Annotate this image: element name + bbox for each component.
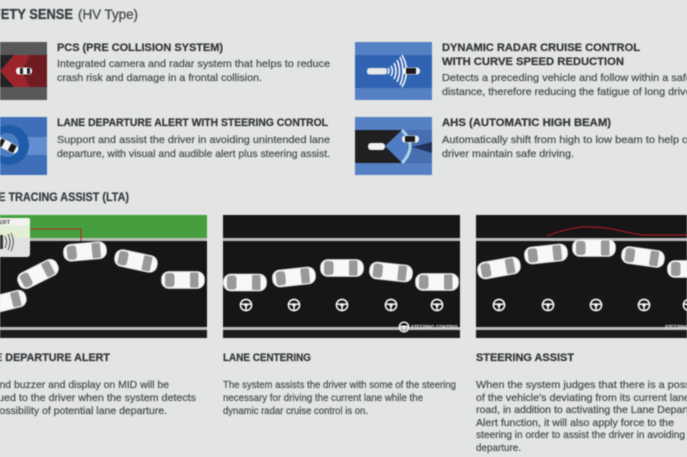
cars bbox=[224, 260, 458, 291]
description: automatic high beam bbox=[442, 135, 687, 160]
description bbox=[0, 380, 196, 417]
callout: alert display bbox=[0, 218, 30, 257]
description: PCS bbox=[57, 59, 330, 84]
column: lane departure alert text bbox=[0, 352, 196, 417]
heading: dynamic radar cruise control bbox=[442, 42, 640, 68]
heading: dynamic radar cruise control: DYNAMIC RADAR CRUISE CONTROL bbox=[442, 42, 640, 54]
column: steering assist text bbox=[476, 352, 687, 454]
description: automatic high beam: Automatically shift from high to low beam to help our bbox=[442, 135, 687, 146]
description: dynamic radar cruise control: distance, therefore reducing the fatigue of long drives. bbox=[442, 87, 687, 98]
description: PCS: Integrated camera and radar system that helps to reduce bbox=[57, 59, 330, 70]
panel: steering assist diagram bbox=[476, 215, 687, 338]
icon: automatic high beam bbox=[355, 117, 432, 175]
legend: steering control bbox=[399, 322, 460, 332]
heading: lane departure alert: LANE DEPARTURE ALERT WITH STEERING CONTROL bbox=[57, 117, 328, 129]
title bbox=[0, 7, 138, 23]
description: automatic high beam: driver maintain safe driving. bbox=[442, 149, 574, 160]
icon: lane departure bbox=[0, 117, 47, 175]
feature: automatic high beam bbox=[355, 117, 687, 175]
description: lane departure alert bbox=[57, 135, 330, 160]
description bbox=[223, 380, 456, 417]
panel: lane departure alert diagram bbox=[0, 215, 207, 338]
description: Alert function, it will also apply force to the bbox=[476, 418, 674, 429]
description: necessary for driving the current lane while the bbox=[223, 393, 423, 404]
cars bbox=[476, 240, 687, 280]
steering wheels bbox=[493, 299, 687, 311]
legend: steering control: STEERING CONTROL bbox=[411, 325, 460, 331]
feature: PCS bbox=[0, 42, 330, 100]
description: steering in order to assist the driver in avoiding bbox=[476, 430, 685, 441]
description: of the vehicle's deviating from its current lane bbox=[476, 393, 687, 404]
feature: dynamic radar cruise control bbox=[355, 42, 687, 100]
warning line bbox=[30, 229, 81, 241]
description: lane departure alert: departure, with visual and audible alert plus steering assist. bbox=[57, 149, 330, 160]
column: lane centering text bbox=[223, 352, 456, 417]
description bbox=[476, 380, 687, 454]
feature: lane departure alert bbox=[0, 117, 330, 175]
icon: radar cruise bbox=[355, 42, 432, 100]
description: lane departure alert: Support and assist the driver in avoiding unintended lane bbox=[57, 135, 330, 146]
heading: dynamic radar cruise control: WITH CURVE SPEED REDUCTION bbox=[442, 56, 624, 68]
description: dynamic radar cruise control: Detects a preceding vehicle and follow within a safe bbox=[442, 73, 687, 84]
description: PCS: crash risk and damage in a frontal collision. bbox=[57, 73, 262, 84]
icon: pre collision system bbox=[0, 42, 47, 100]
description: departure. bbox=[476, 443, 521, 454]
heading: PCS: PCS (PRE COLLISION SYSTEM) bbox=[57, 42, 223, 54]
title: (HV Type) bbox=[78, 7, 138, 22]
heading: lane centering: LANE CENTERING bbox=[223, 352, 311, 364]
red trajectory bbox=[547, 227, 687, 236]
panel: lane centering diagram bbox=[223, 215, 460, 338]
heading: steering assist: STEERING ASSIST bbox=[476, 352, 574, 364]
description: dynamic radar cruise control is on. bbox=[223, 406, 368, 417]
description: The system assists the driver with some of the steering bbox=[223, 380, 456, 391]
steering wheels bbox=[240, 299, 443, 311]
description: dynamic radar cruise control bbox=[442, 73, 687, 98]
heading: automatic high beam: AHS (AUTOMATIC HIGH BEAM) bbox=[442, 117, 611, 129]
cars bbox=[0, 241, 204, 315]
